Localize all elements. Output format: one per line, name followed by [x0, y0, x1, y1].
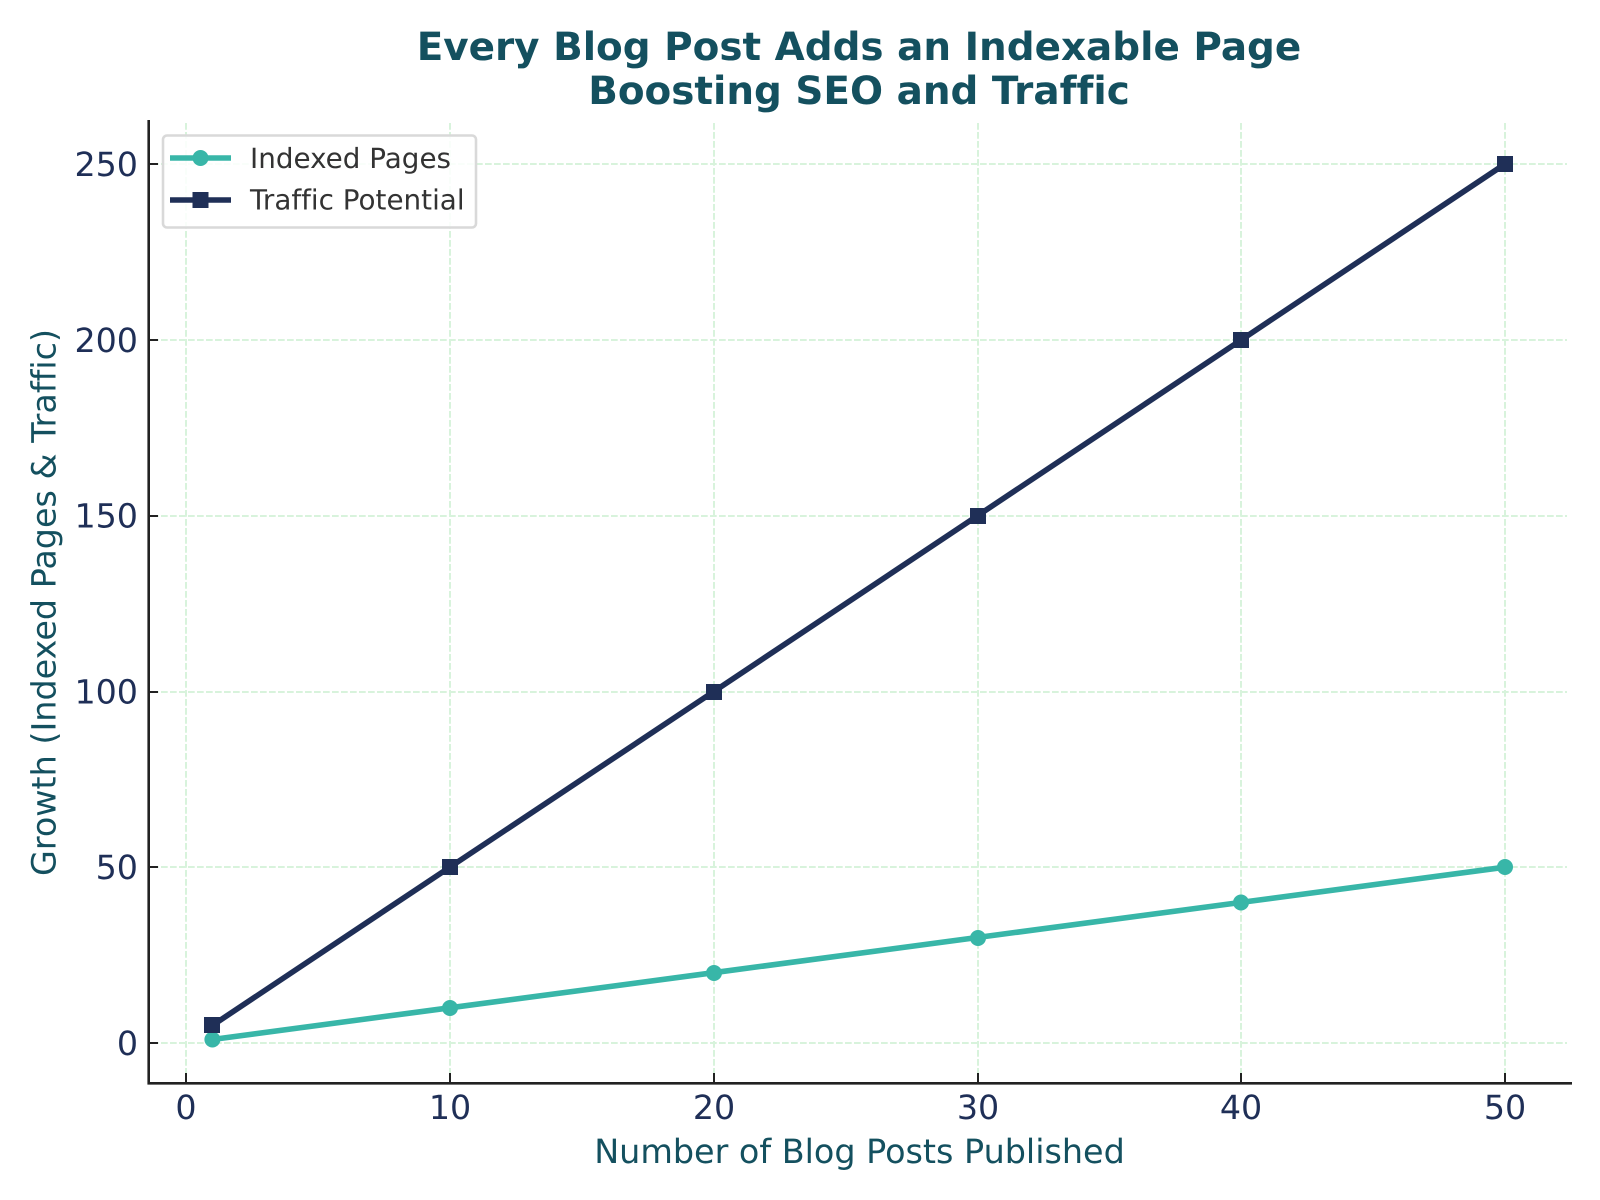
legend	[163, 136, 476, 228]
y axis tick labels: 50	[96, 848, 138, 887]
legend: Indexed Pages	[250, 142, 451, 175]
y axis tick labels: 0	[117, 1024, 138, 1063]
x axis tick labels	[175, 1088, 1526, 1127]
y axis tick labels: 200	[74, 321, 138, 360]
x axis tick labels: 30	[957, 1088, 999, 1127]
legend: Traffic Potential	[249, 184, 465, 216]
series: indexed pages	[204, 859, 1513, 1048]
x axis label: Number of Blog Posts Published	[594, 1132, 1125, 1171]
x axis tick labels: 20	[693, 1088, 735, 1127]
series: traffic potential	[204, 156, 1513, 1033]
axes	[148, 120, 1572, 1084]
y axis tick labels: 100	[74, 672, 138, 711]
x axis tick labels: 10	[429, 1088, 471, 1127]
y axis tick labels: 250	[74, 145, 138, 184]
title: Every Blog Post Adds an Indexable Page	[417, 25, 1301, 70]
y axis label: Growth (Indexed Pages & Traffic)	[24, 329, 64, 876]
title: Boosting SEO and Traffic	[588, 69, 1130, 114]
x axis tick labels: 50	[1484, 1088, 1526, 1127]
x axis tick labels: 0	[175, 1088, 197, 1127]
y axis tick labels	[74, 145, 138, 1063]
y axis tick labels: 150	[74, 497, 138, 536]
x axis tick labels: 40	[1220, 1088, 1262, 1127]
title	[417, 25, 1301, 114]
